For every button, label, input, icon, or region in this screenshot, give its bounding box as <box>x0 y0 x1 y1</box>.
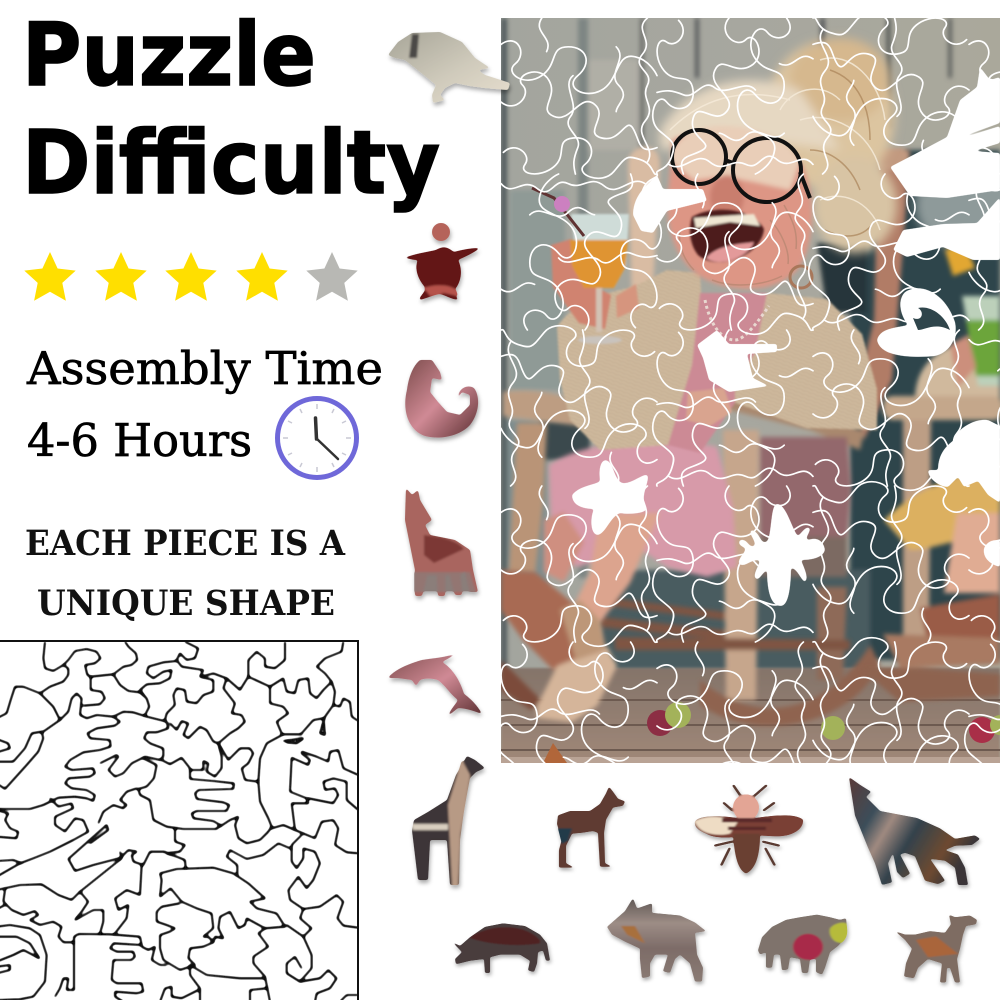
grandmother: hair, face and glasses <box>660 38 897 340</box>
piece: bee <box>695 785 803 874</box>
piece: wild pig <box>607 898 706 982</box>
panel: puzzle cut line drawing <box>0 641 358 1000</box>
star rating: 4 of 5 <box>24 252 358 301</box>
piece: monkey curl <box>405 360 478 438</box>
assembly time text: Assembly Time <box>26 342 383 395</box>
unique shape text: UNIQUE SHAPE <box>37 583 335 624</box>
piece: dolphin <box>388 653 482 716</box>
right grandmother partial <box>860 244 1000 702</box>
title: Difficulty <box>22 112 440 214</box>
photo background: wooden wall and floor <box>501 18 1000 763</box>
piece: turtle <box>404 223 480 300</box>
piece: dog <box>557 787 625 868</box>
piece: bison with fruit <box>758 915 847 975</box>
icon: clock <box>278 398 356 478</box>
dark curl inside wave hole <box>913 307 950 330</box>
grandmother: cardigan and dress <box>501 437 737 722</box>
unique shape text: EACH PIECE IS A <box>25 523 346 564</box>
assembly time text <box>26 342 383 467</box>
panel: puzzle photo <box>497 14 1000 802</box>
white puzzle cut lines <box>497 14 1000 802</box>
left rocking chair <box>503 147 910 726</box>
earring and necklace <box>790 266 812 288</box>
piece: deer <box>895 915 977 983</box>
piece: fox <box>405 488 478 596</box>
assembly time text: 4-6 Hours <box>27 414 252 467</box>
piece: boar <box>452 923 550 973</box>
title: Puzzle <box>22 4 316 106</box>
piece: giraffe <box>412 756 485 885</box>
unique shape text <box>25 523 346 624</box>
fruit and leaves on floor <box>543 702 1000 763</box>
piece: wolf <box>849 777 980 885</box>
removed pieces: white holes <box>572 67 1000 606</box>
glass with orange cocktail and hand <box>532 188 639 344</box>
piece: crow <box>388 32 510 103</box>
title <box>22 4 440 214</box>
